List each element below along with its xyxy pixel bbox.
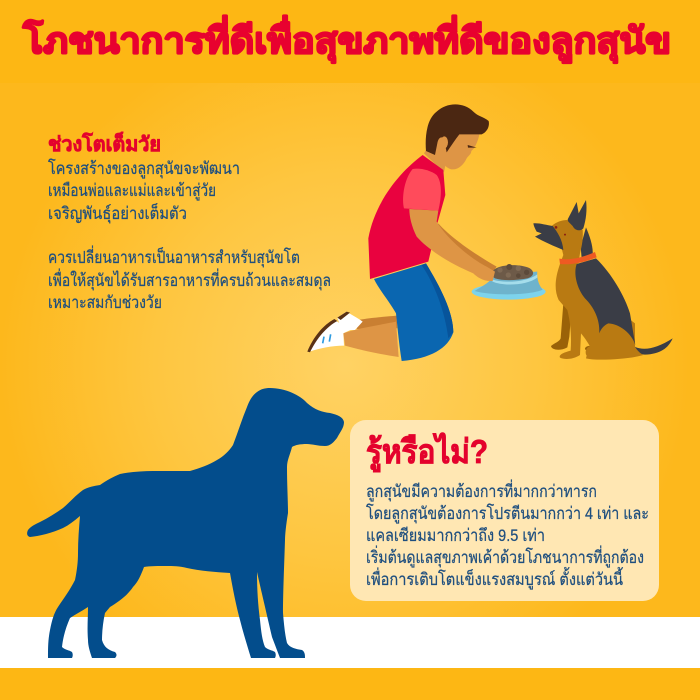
white floor band <box>0 617 700 668</box>
sleeve <box>403 169 441 211</box>
far front leg <box>551 303 572 350</box>
neck dark <box>581 227 593 258</box>
eye <box>555 226 557 229</box>
text block: adult stage <box>48 131 331 312</box>
callout body <box>366 479 649 590</box>
callout panel <box>350 420 659 601</box>
body tan <box>556 263 643 360</box>
shirt <box>368 155 445 279</box>
callout body: ลูกสุนัขมีความต้องการที่มากกว่าทารก <box>366 479 597 502</box>
paragraph: development: เจริญพันธุ์อย่างเต็มตัว <box>48 202 187 224</box>
front arm <box>409 209 495 281</box>
callout body: โดยลูกสุนัขต้องการโปรตีนมากกว่า 4 เท่า และ <box>366 503 649 524</box>
bowl <box>472 272 546 300</box>
dog food <box>492 264 533 280</box>
ears <box>568 200 587 230</box>
tail <box>633 338 673 355</box>
central glow panel <box>0 83 700 617</box>
paragraph: change food: เพื่อให้สุนัขได้รับสารอาหารที่ครบถ้วนและสมดุล <box>48 268 331 291</box>
shorts <box>374 263 453 361</box>
ear <box>441 136 448 148</box>
paragraph: change food: ควรเปลี่ยนอาหารเป็นอาหารสำหรับสุนัขโต <box>48 245 300 268</box>
callout: did you know <box>350 420 659 601</box>
back leg and shoe <box>337 312 397 330</box>
illustration: man feeding dog <box>307 104 546 361</box>
title: โภชนาการที่ดีเพื่อสุขภาพที่ดีของลูกสุนัข <box>22 15 671 64</box>
heading: adult stage: ช่วงโตเต็มวัย <box>48 131 161 156</box>
callout body: เริ่มต้นดูแลสุขภาพเค้าด้วยโภชนาการที่ถูกต้อง <box>366 545 644 568</box>
paragraph: development <box>48 158 240 224</box>
illustration: german shepherd <box>533 200 673 360</box>
paragraph: development: โครงสร้างของลูกสุนัขจะพัฒนา <box>48 158 240 179</box>
back arm <box>433 223 497 273</box>
dark back saddle <box>575 258 635 345</box>
front shoe <box>307 319 353 352</box>
neck and head <box>424 104 489 172</box>
collar <box>559 252 597 264</box>
callout body: เพื่อการเติบโตแข็งแรงสมบูรณ์ ตั้งแต่วันนี้ <box>366 567 623 590</box>
far hind paw <box>585 345 602 352</box>
paragraph: change food <box>48 245 331 312</box>
head <box>552 220 583 264</box>
front leg <box>343 322 399 357</box>
paragraph: development: เหมือนพ่อและแม่และเข้าสู่วัย <box>48 181 216 201</box>
snout <box>533 223 563 250</box>
paragraph: change food: เหมาะสมกับช่วงวัย <box>48 293 162 312</box>
silhouette dog <box>27 388 344 658</box>
callout heading: รู้หรือไม่? <box>366 432 488 473</box>
callout body: แคลเซียมมากกว่าถึง 9.5 เท่า <box>366 526 545 545</box>
